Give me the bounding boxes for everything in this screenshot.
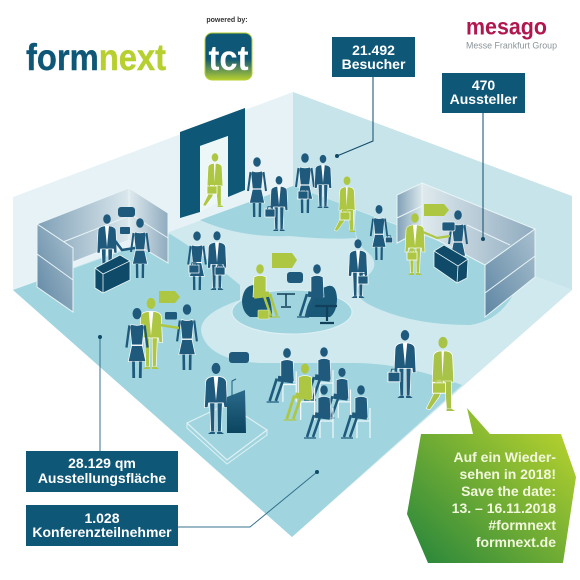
green save-the-date callout: Auf ein Wieder- [453, 449, 556, 465]
green bubble [159, 291, 180, 303]
Ausstellungsflaeche dot [98, 335, 102, 339]
label: Konferenzteilnehmer: 1.028 [84, 510, 120, 526]
green bag [407, 250, 417, 260]
green bubble [272, 253, 297, 268]
green walking man [426, 337, 455, 411]
powered by label: powered by: [206, 17, 248, 24]
left exhibition booth [37, 188, 168, 312]
label: Ausstellungsflaeche [26, 451, 178, 492]
visitors near door [203, 153, 392, 298]
dark bubble right booth [442, 222, 455, 231]
tct logo: tct [208, 39, 249, 78]
visitor woman [131, 218, 149, 278]
seated person 5 [341, 385, 370, 438]
man [314, 155, 332, 208]
green seated person [284, 364, 315, 420]
label: Konferenzteilnehmer [26, 505, 178, 546]
exhibitor man [97, 214, 117, 276]
mesago logo [466, 14, 557, 52]
green save-the-date callout: formnext.de [476, 534, 556, 550]
green save-the-date callout: Save the date: [461, 483, 556, 499]
label: Besucher: Besucher [342, 56, 406, 72]
bag [358, 274, 368, 284]
woman [248, 157, 266, 217]
small speech bubble left booth [120, 227, 130, 234]
Aussteller line [482, 113, 484, 239]
audience on chairs [267, 347, 370, 438]
Konferenz line [178, 472, 317, 527]
man [348, 239, 368, 298]
green bubble [424, 204, 449, 216]
door [180, 108, 245, 218]
Aussteller dot [481, 237, 485, 241]
dark bubble [287, 272, 303, 283]
green visitor [405, 213, 425, 275]
woman left [126, 308, 148, 378]
conversation pair [188, 231, 226, 290]
bag [215, 264, 225, 275]
speech bubbles [118, 207, 135, 217]
bag [340, 210, 350, 220]
lectern [227, 390, 246, 433]
stool [315, 306, 337, 323]
counter [95, 255, 130, 293]
green seated person [253, 264, 280, 317]
speaker [204, 363, 228, 434]
handshake arm [423, 232, 450, 238]
label: Aussteller [442, 73, 525, 113]
standing man with bag [388, 330, 416, 398]
label: Aussteller: 470 [472, 77, 495, 93]
right pouf [305, 286, 337, 317]
Ausstellungsflaeche line [99, 337, 101, 451]
bag [265, 206, 275, 217]
Besucher dot [335, 154, 339, 158]
woman [371, 205, 387, 260]
handshake group [126, 291, 197, 378]
woman with bag [296, 153, 314, 213]
dark bubble [165, 312, 177, 320]
green man [140, 298, 162, 369]
label: Besucher: 21.492 [352, 42, 395, 58]
Konferenz dot [315, 470, 319, 474]
handshake arms [113, 238, 135, 250]
right exhibition booth [397, 183, 535, 317]
man with bag [270, 176, 288, 231]
man with bag [208, 231, 226, 290]
mesago logo: mesago [466, 14, 547, 40]
label: Konferenzteilnehmer: Konferenzteilnehmer [32, 524, 172, 540]
green save-the-date callout: 13. – 16.11.2018 [452, 500, 556, 516]
seated person 1 [267, 348, 296, 402]
label: Aussteller: Aussteller [450, 91, 518, 107]
left pouf [242, 285, 272, 317]
woman right [177, 304, 197, 370]
bag [189, 262, 199, 273]
green save-the-date callout: sehen in 2018! [460, 466, 556, 482]
lounge group [242, 253, 337, 323]
speech bubble [229, 352, 249, 363]
seated person 3 [323, 368, 351, 418]
exhibitor woman [449, 210, 467, 270]
counter [434, 245, 468, 283]
platform [187, 404, 267, 460]
label: Besucher [332, 37, 415, 77]
bag [298, 188, 308, 199]
green bag [258, 310, 269, 319]
seated person 4 [304, 385, 333, 438]
speaker on stage [187, 352, 267, 464]
bag of walker [207, 184, 217, 194]
label: Ausstellungsflaeche: Ausstellungsfläche [38, 470, 166, 486]
hall room: walls and floor [13, 92, 572, 537]
seated person 2 [304, 347, 333, 400]
green save-the-date callout [407, 408, 576, 563]
platform edge [187, 423, 267, 464]
label: Ausstellungsflaeche: 28.129 qm [68, 455, 136, 471]
green walker [334, 176, 356, 232]
handshake arm [160, 325, 179, 328]
dark seated man [297, 264, 324, 317]
green walker in door [203, 153, 224, 207]
green save-the-date callout: #formnext [488, 517, 556, 533]
bag [386, 235, 392, 243]
table [277, 294, 295, 307]
mesago logo: Messe Frankfurt Group [466, 40, 557, 52]
woman with bag [188, 231, 206, 290]
formnext logo: formnext [26, 37, 166, 78]
microphone [232, 379, 236, 397]
Besucher line [337, 77, 373, 156]
